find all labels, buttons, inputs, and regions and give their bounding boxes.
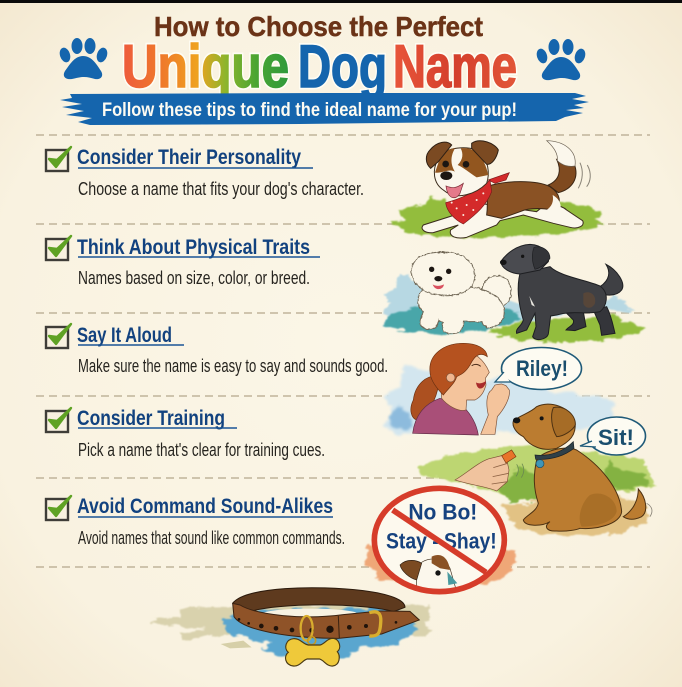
no-sign text: [386, 499, 497, 553]
icon: checkbox: [46, 408, 71, 432]
speech bubble: Sit!: [580, 417, 646, 455]
no-sign: sound-alike warning: [363, 488, 517, 592]
heading: Avoid Command Sound-Alikes: [77, 495, 333, 518]
bone tag: [286, 638, 340, 666]
description: Avoid names that sound like common commands.: [78, 528, 345, 548]
description: Choose a name that fits your dog's character.: [78, 179, 364, 199]
collar front band: [233, 603, 419, 638]
icon: left paw: [58, 38, 109, 79]
banner brush stroke: [60, 93, 589, 125]
banner: [60, 93, 589, 125]
heading: Think About Physical Traits: [77, 236, 310, 259]
no-sign text: No Bo!: [408, 499, 477, 524]
title: [122, 11, 517, 100]
tip 1: Consider Their Personality: [46, 146, 364, 199]
no-sign text: Stay - Shay!: [386, 528, 497, 553]
heading: Consider Training: [77, 407, 225, 430]
peeking dog: [400, 555, 458, 588]
tip 4: Consider Training: [46, 407, 325, 460]
title word: Dog: Dog: [298, 33, 387, 100]
title word: Name: Name: [393, 33, 517, 100]
paint wash: [152, 603, 433, 638]
title word: Unique: Unique: [122, 33, 289, 100]
title line: How to Choose the Perfect: How to Choose the Perfect: [154, 11, 483, 42]
description: Make sure the name is easy to say and sounds good.: [78, 356, 388, 376]
illustration: training scene with golden dog and clicker: [418, 404, 655, 537]
collar back band: [233, 588, 405, 612]
speech bubble: Riley!: Riley!: [516, 356, 568, 381]
illustration: leather collar with bone tag: [152, 588, 433, 666]
icon: checkbox: [46, 236, 71, 260]
illustration: white fluffy dog and black dog: [383, 244, 645, 343]
title word: Dog: Dog: [298, 33, 387, 100]
title word: Unique: Unique: [122, 33, 289, 100]
illustration: woman calling a name: [384, 343, 616, 435]
heading: Consider Their Personality: [77, 146, 301, 169]
icon: checkbox: [46, 324, 71, 348]
icon: checkbox: [46, 147, 71, 171]
tip 3: Say It Aloud: [46, 324, 388, 376]
icon: right paw: [535, 39, 587, 80]
banner text: Follow these tips to find the ideal name for your pup!: [102, 100, 517, 121]
speech bubble: Sit!: Sit!: [598, 425, 634, 450]
tip 2: Think About Physical Traits: [46, 236, 320, 288]
collar buckle: [369, 612, 381, 636]
illustration: playful brown and white dog: [392, 141, 603, 239]
description: Pick a name that's clear for training cues.: [78, 440, 325, 460]
title word: Name: Name: [393, 33, 517, 100]
description: Names based on size, color, or breed.: [78, 268, 310, 288]
heading: Say It Aloud: [77, 324, 172, 347]
speech bubble: Riley!: [495, 348, 582, 390]
icon: checkbox: [46, 496, 71, 520]
tip 5: Avoid Command Sound-Alikes: [46, 495, 345, 548]
